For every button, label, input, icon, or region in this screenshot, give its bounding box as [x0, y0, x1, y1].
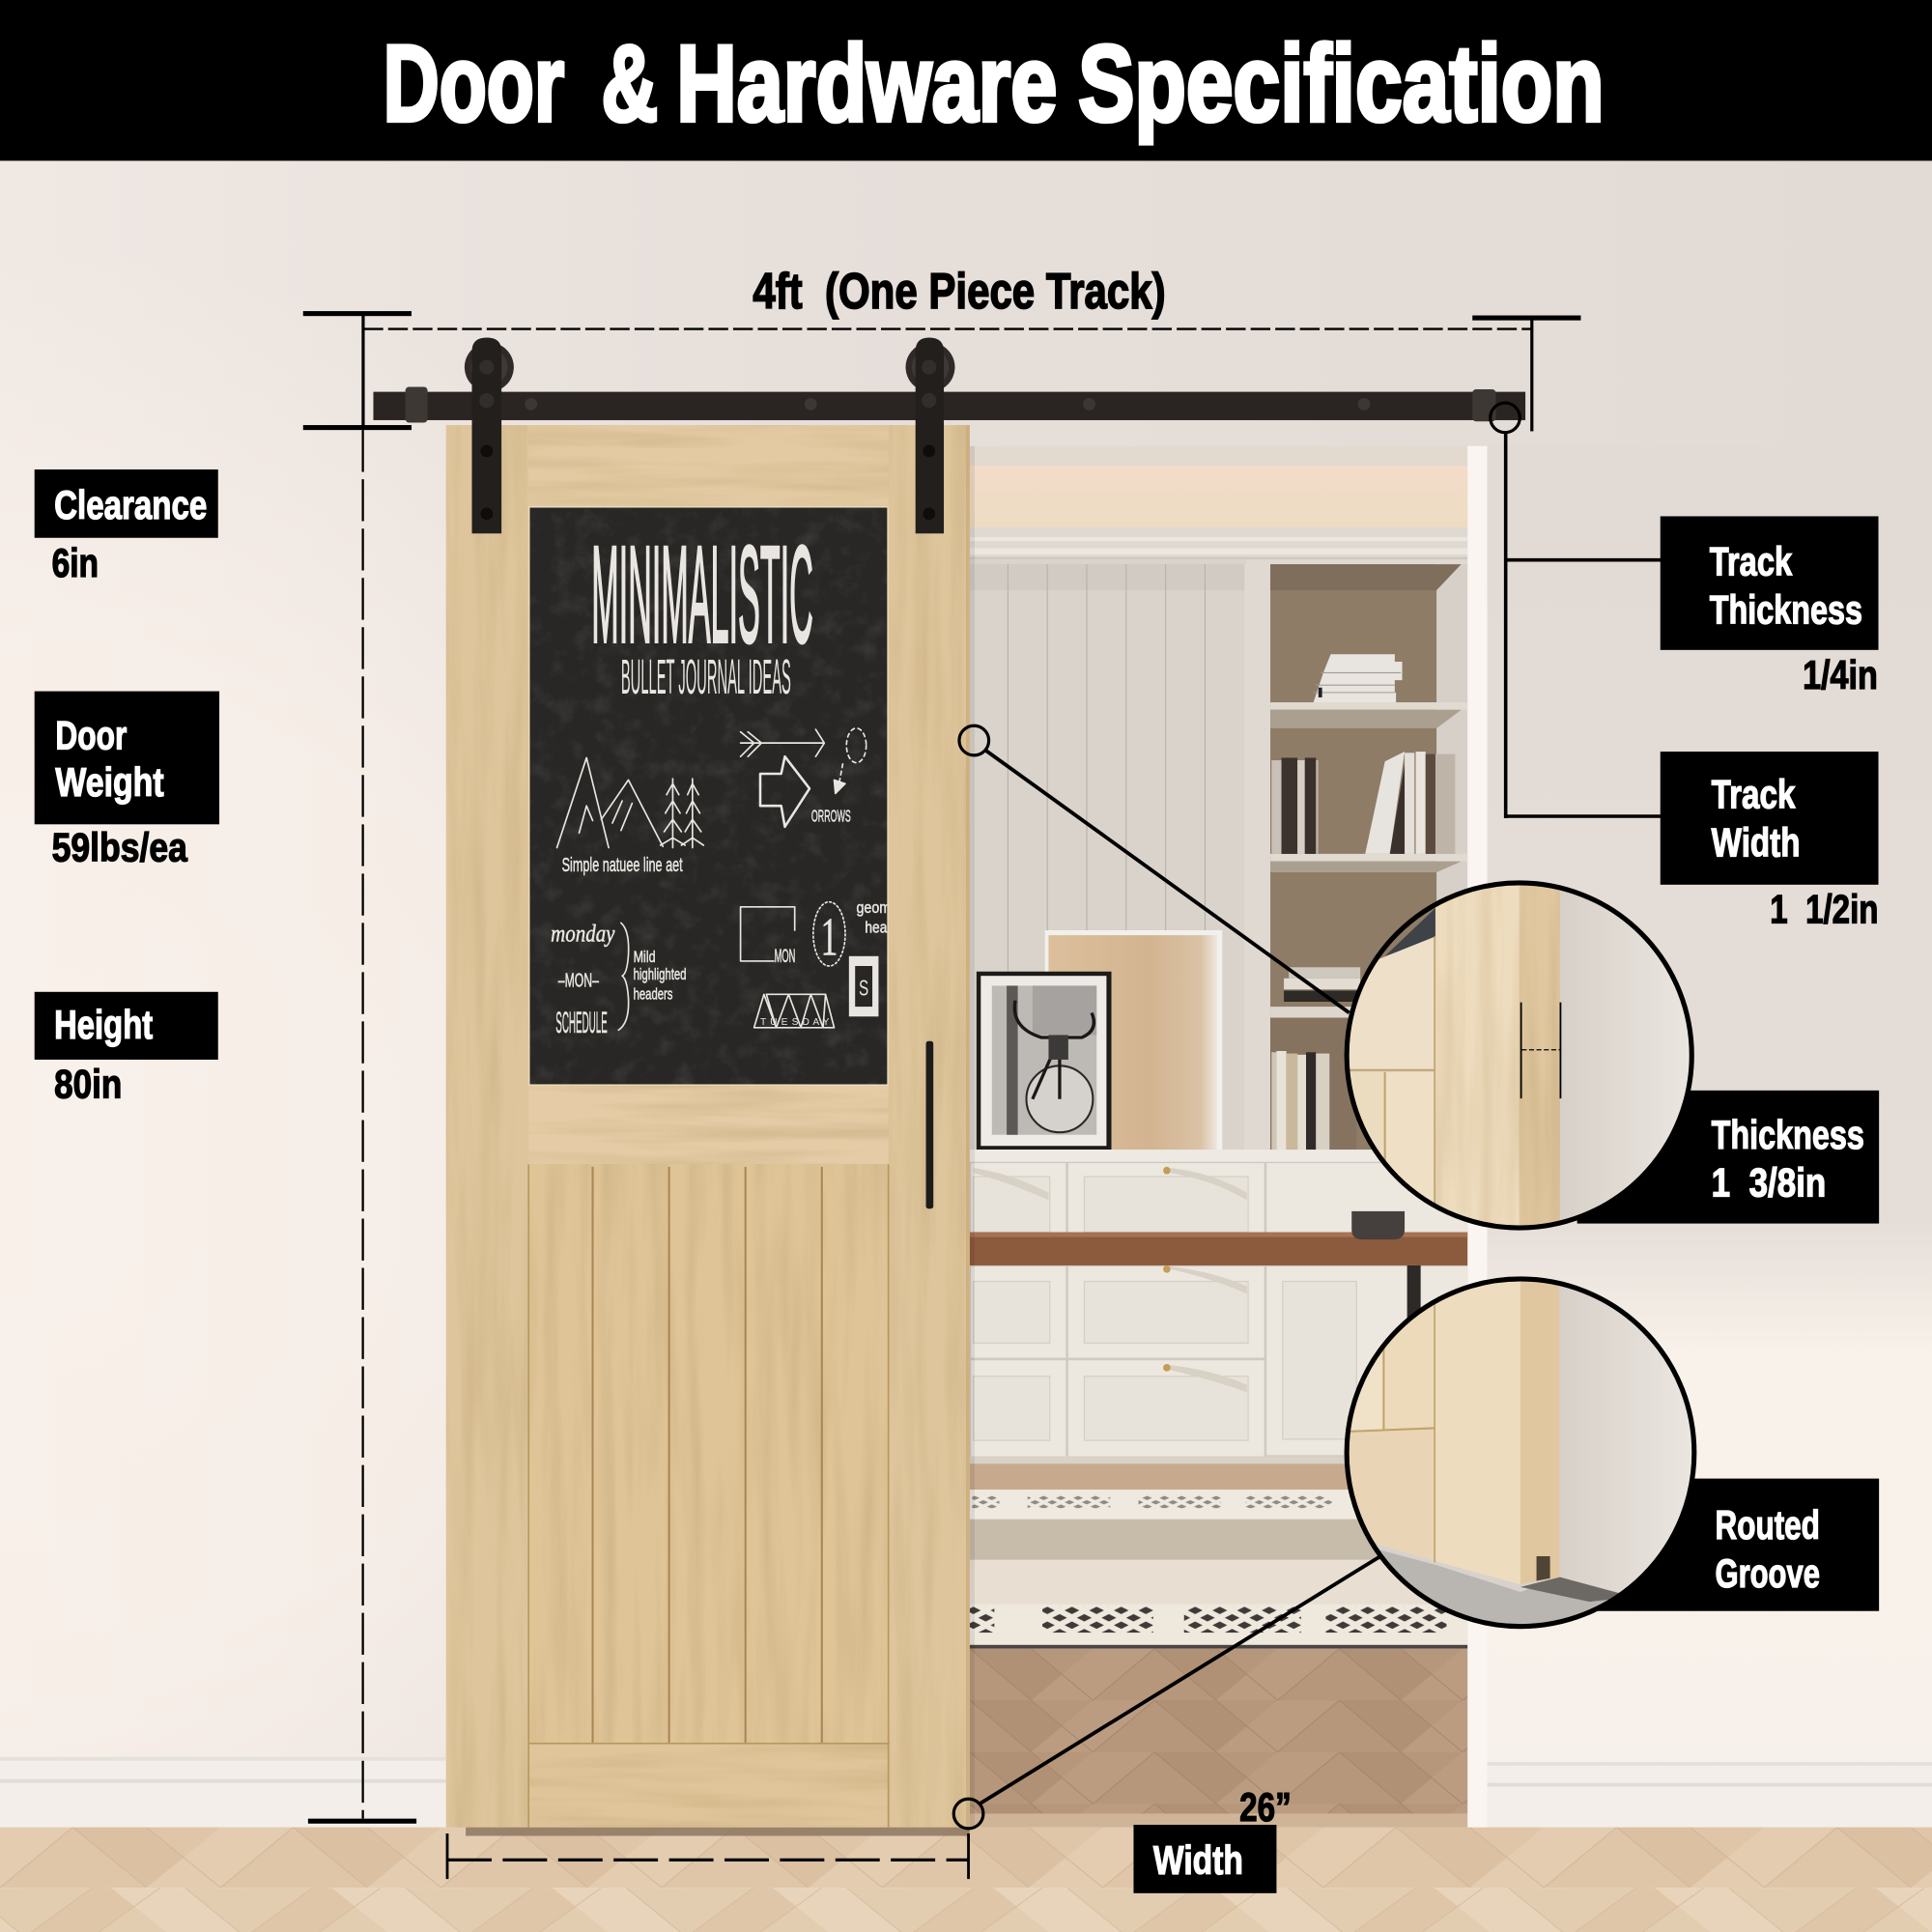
title bar [0, 0, 1932, 160]
callout pointer: routed groove [953, 1555, 1382, 1829]
chalk geometric headers: MON [775, 947, 795, 967]
track thickness label: Thickness [1710, 586, 1862, 632]
width value: 26” [1239, 1784, 1292, 1830]
routed groove label: Routed [1716, 1502, 1820, 1548]
track rail [373, 392, 1525, 420]
infographic: door and hardware specification: MINIMALISTIC [591, 519, 813, 672]
chalk arrows [741, 728, 867, 827]
height label [35, 992, 218, 1106]
track thickness label [1661, 516, 1879, 697]
track leader lines [1491, 403, 1661, 818]
title text: Specification [1078, 22, 1605, 144]
track thickness label: Track [1710, 539, 1793, 584]
right stopper [1472, 389, 1495, 421]
callout pointer: door thickness [959, 725, 1350, 1012]
chalk geometric headers [741, 898, 895, 1028]
track length label: 4ft (One Piece Track) [753, 264, 1166, 320]
door weight label: Weight [55, 759, 164, 805]
left door shadow strip [970, 446, 975, 1828]
track bolts [525, 398, 1370, 411]
title text: Door [384, 22, 564, 144]
door weight label [35, 692, 219, 870]
left stopper [406, 387, 428, 423]
door thickness label: Thickness [1712, 1112, 1864, 1157]
width label: Width [1153, 1837, 1243, 1883]
door height dimension [308, 430, 416, 1824]
title text [384, 22, 1605, 144]
title text: & [601, 22, 658, 144]
chalk headers list: highlighted [634, 965, 686, 983]
height label: 80in [54, 1061, 122, 1106]
chalk geometric headers: T U E S D A Y [760, 1017, 830, 1028]
door thickness label: 1 3/8in [1712, 1160, 1826, 1206]
barn door [446, 425, 970, 1828]
left hanger strap [465, 337, 514, 533]
chalk headers list [551, 919, 686, 1039]
chalk headers list: Mild [634, 948, 656, 966]
thickness marks [1521, 1003, 1560, 1098]
sideboard cabinets [970, 1150, 1467, 1463]
artwork: large canvas [1045, 930, 1222, 1150]
door weight label: Door [55, 713, 127, 758]
chalkboard panel: ORROWS [811, 807, 851, 826]
door frame stiles and rails [446, 425, 970, 1828]
door handle [926, 1041, 933, 1208]
ceiling glow [970, 466, 1467, 527]
height label: Height [54, 1002, 153, 1047]
chalk headers list: SCHEDULE [555, 1005, 608, 1039]
panelled wall [970, 559, 1247, 1163]
books on shelves [1271, 654, 1455, 1151]
barn door: BULLET JOURNAL IDEAS [621, 649, 791, 704]
crown moulding [970, 527, 1467, 564]
floor: chevron planks [0, 1828, 1932, 1932]
door edge shadow [966, 425, 970, 1828]
track width label: Track [1712, 772, 1796, 817]
chalk headers list: monday [551, 919, 615, 947]
artwork: framed bicycle photo [977, 972, 1112, 1150]
door thickness label [1577, 1091, 1879, 1224]
chalk geometric headers: geom [856, 898, 891, 917]
wooden desk [970, 1233, 1467, 1265]
clearance label [35, 469, 218, 585]
magnified detail: door thickness [1343, 875, 1707, 1244]
chalk mountains and trees [557, 757, 703, 848]
chalk geometric headers: head [865, 919, 895, 937]
chalk headers list: –MON– [558, 971, 599, 992]
routed groove label: Groove [1716, 1550, 1820, 1596]
baseboard [0, 1757, 1932, 1828]
soffit and jamb [970, 446, 1488, 1828]
plank panels [528, 1164, 890, 1828]
clearance label: 6in [52, 540, 99, 585]
width label [1133, 1825, 1276, 1893]
door width dimension [447, 1833, 969, 1879]
bookcase [1244, 564, 1467, 1155]
track width label: Width [1712, 819, 1801, 865]
title text: Hardware [676, 22, 1057, 144]
right hanger strap [906, 337, 955, 533]
chalk headers list: headers [634, 984, 672, 1003]
chalk geometric headers: S [859, 976, 868, 1001]
track width label: 1 1/2in [1770, 886, 1879, 931]
magnified detail: routed groove [1343, 1269, 1707, 1638]
doorway opening with room interior [970, 446, 1488, 1828]
chalk geometric headers: 1 [820, 908, 838, 968]
track width label [1661, 752, 1879, 931]
cup on desk [1351, 1211, 1405, 1239]
clearance label: Clearance [54, 482, 207, 527]
rug and floor [970, 1457, 1467, 1828]
track length dimension [363, 264, 1580, 431]
door weight label: 59lbs/ea [52, 825, 187, 870]
barn door track [373, 337, 1525, 533]
routed groove label [1589, 1479, 1879, 1611]
clearance dimension [303, 311, 412, 430]
chalk caption: nature line art: Simple natuee line aet [562, 855, 683, 876]
chalkboard panel [528, 506, 895, 1086]
track thickness label: 1/4in [1803, 652, 1878, 697]
